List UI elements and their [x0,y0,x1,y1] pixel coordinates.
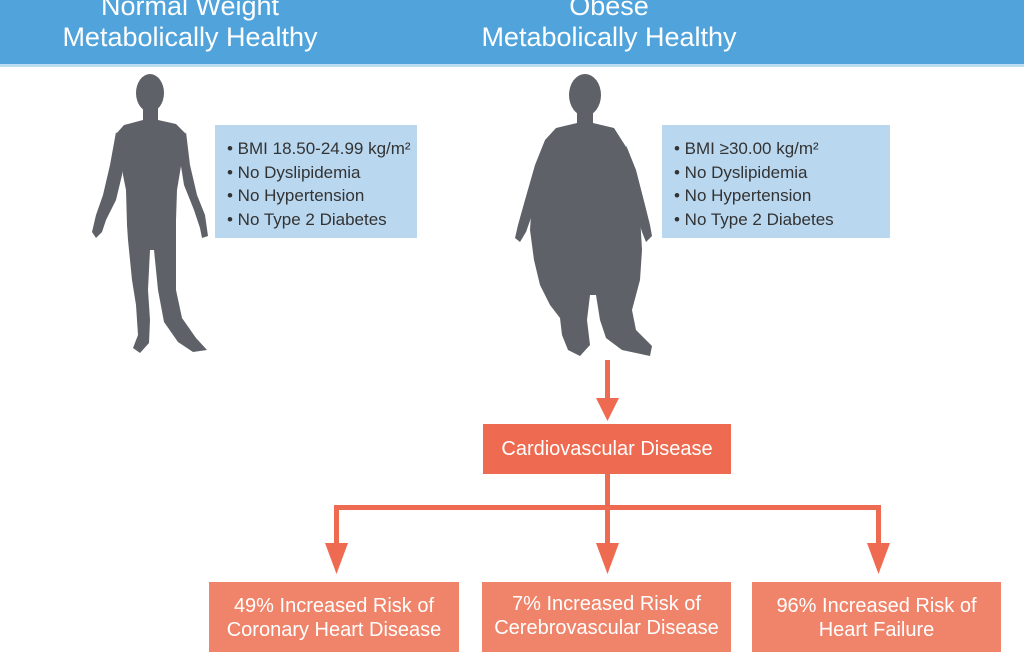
info box: normal weight criteria: • No Dyslipidemia [227,162,360,182]
info box: normal weight criteria: • No Hypertension [227,186,364,205]
icon: obese silhouette [515,74,652,356]
heading: normal weight: Metabolically Healthy [62,22,318,52]
box: cardiovascular disease: Cardiovascular Disease [501,438,713,460]
info box: obese criteria: • No Type 2 Diabetes [674,210,834,228]
heading: obese: Metabolically Healthy [481,22,737,52]
outcome: heart failure: 96% Increased Risk of [776,595,977,617]
heading: obese [481,0,737,52]
outcome: coronary heart disease: Coronary Heart Disease [227,619,441,641]
box: cardiovascular disease [483,424,731,474]
info box: normal weight criteria: • BMI 18.50-24.99 kg/m² [227,139,411,158]
outcome: cerebrovascular disease [482,582,731,652]
icon: normal weight silhouette [92,74,208,353]
outcome: heart failure: Heart Failure [819,619,934,641]
info box: obese criteria: • No Hypertension [674,186,811,205]
info box: obese criteria: • No Dyslipidemia [674,162,808,182]
outcome: heart failure [752,582,1001,652]
arrows: branch [325,474,890,574]
arrow: obese to CVD [596,360,619,421]
outcome: coronary heart disease [209,582,459,652]
info box: normal weight criteria: • No Type 2 Diabetes [227,210,387,228]
info box: normal weight criteria [215,125,417,238]
heading: normal weight [62,0,318,52]
outcome: cerebrovascular disease: Cerebrovascular Disease [494,617,719,639]
outcome: cerebrovascular disease: 7% Increased Risk of [512,593,701,615]
info box: obese criteria: • BMI ≥30.00 kg/m² [674,139,819,158]
header band [0,0,1024,67]
info box: obese criteria [662,125,890,238]
outcome: coronary heart disease: 49% Increased Risk of [234,595,434,617]
